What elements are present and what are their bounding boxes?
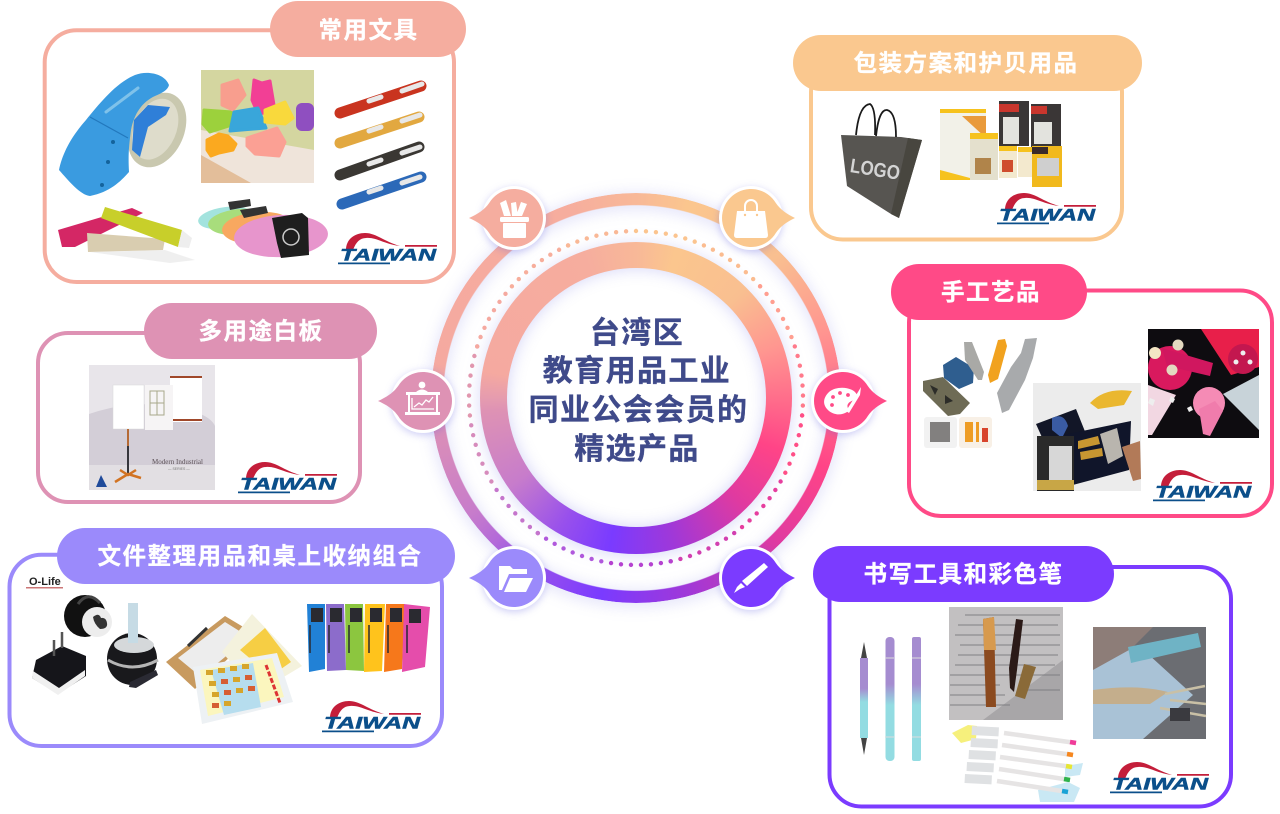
heading: 手工艺品: 手工艺品 — [941, 279, 1041, 305]
heading: 常用文具: 常用文具 — [318, 16, 418, 43]
product: staplers — [340, 84, 422, 204]
Taiwan logo: TAIWAN — [1112, 774, 1209, 794]
Taiwan logo: TAIWAN — [240, 474, 337, 494]
product: desk organiser set — [32, 595, 158, 695]
product: erasers — [58, 207, 195, 263]
heading: 文件整理用品和桌上收纳组合: 文件整理用品和桌上收纳组合 — [98, 542, 422, 569]
product: fountain pens photo — [949, 607, 1063, 720]
Taiwan logo: TAIWAN — [324, 714, 421, 732]
product: foil greeting cards photo — [1033, 383, 1141, 491]
product: watercolour pencils photo — [1093, 627, 1206, 739]
product: colour ring binders — [307, 604, 430, 672]
heading: 多用途白板: 多用途白板 — [198, 317, 324, 344]
label: O-Life brand: O-Life — [29, 576, 61, 588]
Taiwan logo — [238, 462, 337, 494]
panel: 书写工具和彩色笔 — [813, 546, 1231, 806]
product: gradient pens — [860, 637, 921, 761]
heading: 文件整理用品和桌上收纳组合 — [57, 528, 455, 584]
heading: 手工艺品 — [891, 264, 1087, 320]
heading: 包装方案和护贝用品: 包装方案和护贝用品 — [854, 49, 1078, 76]
product: craft punches photo — [1148, 329, 1259, 438]
icon: pencil cup bubble — [469, 186, 546, 250]
Taiwan logo: TAIWAN — [1155, 482, 1252, 502]
icon: whiteboard bubble — [378, 369, 455, 433]
Taiwan logo — [997, 193, 1096, 224]
product: animal stamps photo — [201, 70, 314, 183]
product: whiteboard photo: Modern Industrial — [152, 458, 203, 466]
inner gradient ring — [474, 238, 798, 562]
heading: 书写工具和彩色笔: 书写工具和彩色笔 — [864, 561, 1064, 587]
centre white disc — [507, 268, 766, 527]
product: whiteboard photo: — SERIES — — [168, 467, 190, 471]
heading: 包装方案和护贝用品 — [793, 35, 1142, 91]
icon: shopping bag bubble — [719, 186, 795, 250]
panel: 包装方案和护贝用品 — [793, 35, 1142, 240]
heading: 多用途白板 — [144, 303, 377, 359]
icon: palette bubble — [811, 369, 887, 433]
heading: 常用文具 — [270, 1, 466, 57]
centre title: 同业公会会员的 — [529, 394, 748, 427]
dotted ring — [469, 231, 803, 565]
product: colour markers — [952, 725, 1083, 802]
Taiwan logo — [338, 233, 437, 264]
product: clipboards and charts — [166, 614, 302, 724]
centre title: 台湾区 — [590, 316, 684, 350]
product: correction tapes — [197, 199, 329, 259]
Taiwan logo — [1110, 762, 1209, 794]
icon: folder bubble — [469, 546, 546, 610]
panel: 常用文具 — [45, 1, 466, 282]
product: paper model vehicles — [923, 338, 1037, 448]
heading: 书写工具和彩色笔 — [813, 546, 1114, 602]
Taiwan logo: TAIWAN — [999, 206, 1096, 224]
outer gradient ring — [428, 190, 844, 610]
panel: 文件整理用品和桌上收纳组合 — [10, 528, 455, 746]
product: paper shopping bag — [841, 104, 922, 218]
panel: 多用途白板 — [38, 303, 377, 502]
centre title: 精选产品 — [574, 433, 700, 466]
product: whiteboard photo — [89, 365, 215, 490]
product: tape dispenser — [59, 73, 198, 196]
product: paper shopping bag: LOGO — [849, 155, 901, 185]
Taiwan logo: TAIWAN — [340, 246, 437, 264]
centre title: 教育用品工业 — [543, 355, 731, 388]
Taiwan logo — [322, 701, 421, 732]
panel: 手工艺品 — [891, 264, 1272, 516]
centre title — [529, 316, 748, 466]
icon: fountain pen bubble — [719, 546, 795, 610]
product: laminating pouches — [940, 101, 1062, 187]
Taiwan logo — [1153, 470, 1252, 502]
